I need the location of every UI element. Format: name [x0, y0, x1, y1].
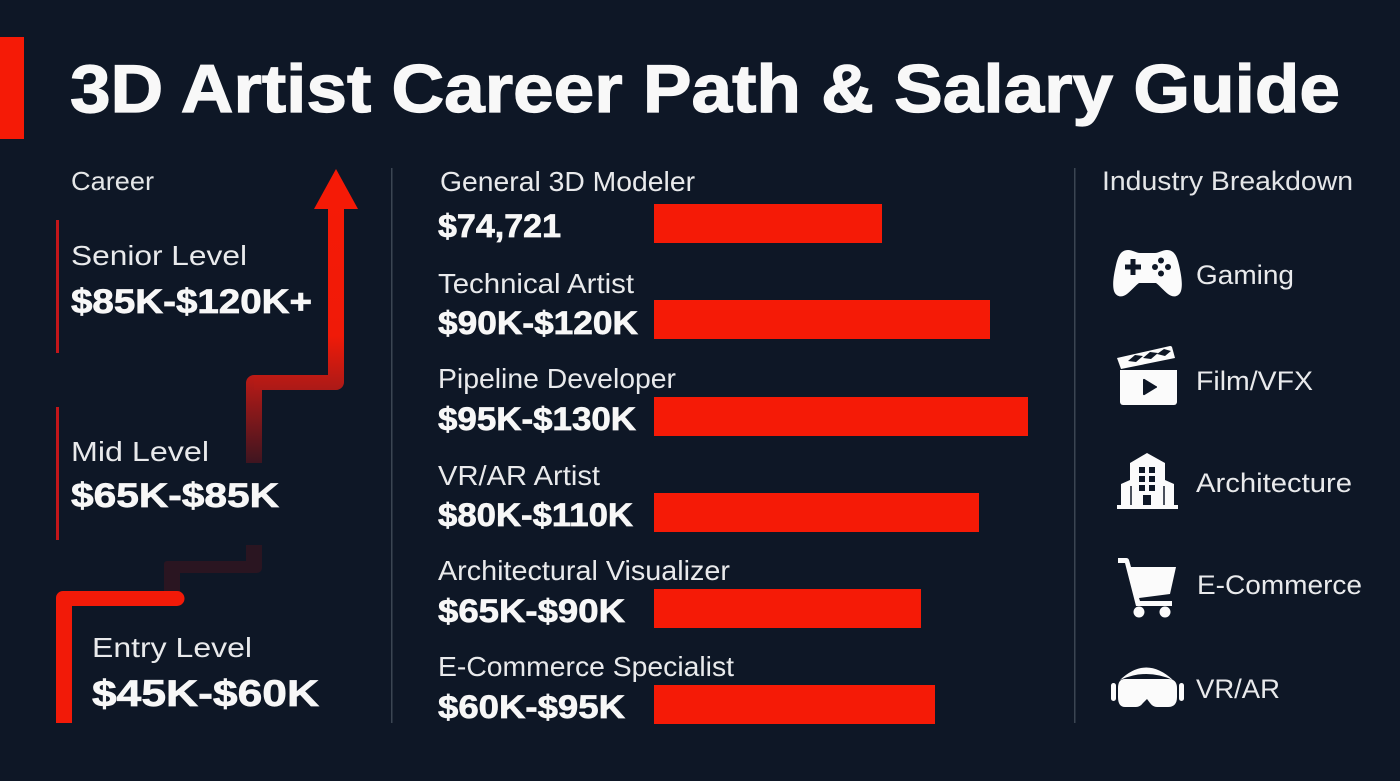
row: E-Commerce Specialist: $60K-$95K: [438, 689, 625, 725]
senior level: [56, 220, 312, 353]
entry level: Entry Level: [92, 632, 252, 663]
row: E-Commerce Specialist: [438, 651, 935, 725]
entry level: [92, 632, 319, 714]
senior level: $85K-$120K+: [71, 283, 312, 321]
industry heading: Industry Breakdown: [1102, 166, 1353, 196]
row: VR/AR Artist: $80K-$110K: [438, 497, 633, 533]
icon: game controller: [1113, 250, 1182, 296]
row: General 3D Modeler: General 3D Modeler: [440, 166, 695, 197]
row: Technical Artist: $90K-$120K: [438, 305, 638, 341]
row: Pipeline Developer: [438, 363, 1028, 437]
row: Pipeline Developer: $95K-$130K: [438, 401, 636, 437]
row: Architecture: [1117, 453, 1352, 509]
panel: salary bar chart: [438, 166, 1028, 725]
icon: VR headset: [1111, 668, 1184, 707]
row: VR/AR: [1111, 668, 1280, 707]
row: General 3D Modeler: [438, 166, 882, 244]
career heading: Career: [71, 166, 154, 196]
row: E-Commerce Specialist: E-Commerce Specialist: [438, 651, 734, 682]
icon: shopping cart: [1118, 558, 1176, 618]
row: Architectural Visualizer: Architectural Visualizer: [438, 555, 730, 586]
senior level: Senior Level: [71, 240, 247, 271]
row: General 3D Modeler: $74,721: [438, 208, 561, 244]
row: Gaming: [1113, 250, 1294, 296]
row: Architectural Visualizer: $65K-$90K: [438, 593, 625, 629]
entry level: $45K-$60K: [92, 673, 319, 714]
row: Technical Artist: [438, 268, 990, 341]
icon: building: [1117, 453, 1178, 509]
panel: career ladder: [56, 166, 358, 723]
mid level: $65K-$85K: [71, 477, 280, 515]
row: E-Commerce: [1118, 558, 1362, 618]
mid level: [56, 407, 280, 540]
panel: industry breakdown: [1102, 166, 1362, 707]
row: Gaming: Gaming: [1196, 260, 1294, 290]
row: VR/AR Artist: [438, 460, 979, 533]
row: Film/VFX: [1117, 346, 1313, 405]
row: VR/AR Artist: VR/AR Artist: [438, 460, 600, 491]
row: E-Commerce: E-Commerce: [1197, 570, 1362, 600]
title accent bar: [0, 37, 24, 139]
row: Architecture: Architecture: [1196, 468, 1352, 498]
row: Architectural Visualizer: [438, 555, 921, 629]
row: Pipeline Developer: Pipeline Developer: [438, 363, 676, 394]
staircase arrow: [56, 169, 358, 723]
title: 3D Artist Career Path & Salary Guide: [70, 51, 1340, 127]
mid level: Mid Level: [71, 436, 209, 467]
row: VR/AR: VR/AR: [1196, 674, 1280, 704]
row: Film/VFX: Film/VFX: [1196, 366, 1313, 396]
icon: clapperboard: [1117, 346, 1177, 405]
row: Technical Artist: Technical Artist: [438, 268, 634, 299]
